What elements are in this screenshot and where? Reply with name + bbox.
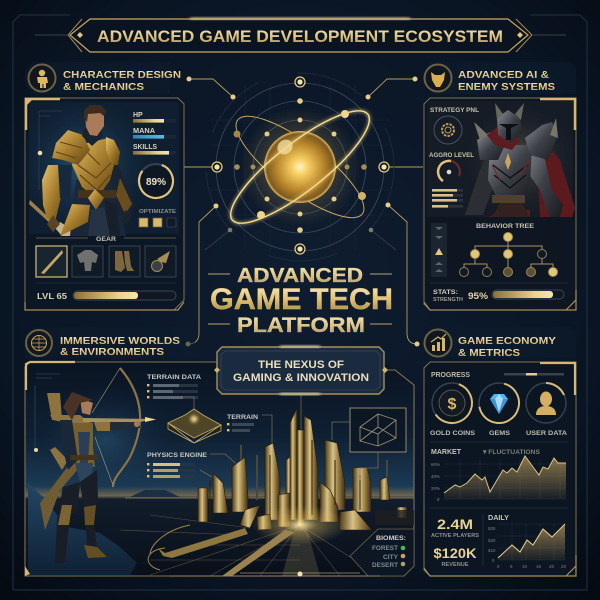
heading: worlds bbox=[25, 327, 195, 358]
city light bbox=[252, 505, 348, 545]
callout: the nexus: THE NEXUS OF bbox=[258, 359, 344, 371]
title banner: ADVANCED GAME DEVELOPMENT ECOSYSTEM bbox=[97, 27, 503, 46]
gold coins: $ bbox=[448, 396, 457, 413]
daily chart: $10 bbox=[488, 548, 496, 553]
cliff bbox=[28, 483, 137, 575]
biomes legend: FOREST bbox=[372, 545, 398, 552]
main title: ADVANCED bbox=[237, 265, 363, 287]
behavior tree: BEHAVIOR TREE bbox=[476, 223, 535, 230]
central atom graphic bbox=[184, 73, 423, 346]
panel: game economy bbox=[424, 327, 576, 576]
grid bbox=[210, 85, 390, 250]
orbit rings bbox=[206, 73, 394, 261]
strategy gear dial: STRATEGY PNL bbox=[430, 107, 479, 114]
daily chart: 5 bbox=[510, 564, 513, 569]
character: dark knight bbox=[465, 103, 575, 217]
aggro gauge bbox=[429, 152, 474, 181]
wireframe cube bbox=[332, 408, 406, 480]
connector lines bbox=[184, 79, 423, 344]
daily chart bbox=[488, 515, 567, 569]
daily chart: 0 bbox=[492, 558, 495, 563]
biomes legend: DESERT bbox=[372, 562, 398, 569]
stats strength bar: STRENGTH bbox=[433, 297, 463, 303]
gold coins: GOLD COINS bbox=[430, 430, 475, 437]
main title: PLATFORM bbox=[237, 314, 365, 337]
callout: the nexus bbox=[214, 346, 388, 395]
daily chart: $30 bbox=[488, 526, 496, 531]
stat bars: SKILLS bbox=[133, 144, 157, 151]
behavior tree bbox=[431, 223, 558, 277]
terrain data list bbox=[147, 374, 201, 410]
terrain label bbox=[227, 414, 272, 445]
heading: economy: & METRICS bbox=[458, 348, 520, 359]
golden orb bbox=[264, 131, 336, 203]
market chart: 0 bbox=[437, 497, 440, 502]
stat bars bbox=[133, 112, 176, 155]
user data: USER DATA bbox=[526, 430, 567, 437]
character: archer bbox=[40, 368, 156, 563]
stats strength bar: STATS: bbox=[433, 289, 458, 296]
biomes legend: CITY bbox=[383, 554, 399, 561]
gear slots: GEAR bbox=[96, 236, 116, 243]
market chart: 40% bbox=[431, 474, 440, 479]
daily chart: $20 bbox=[488, 538, 496, 543]
strategy gear dial bbox=[430, 107, 479, 144]
gems bbox=[475, 379, 523, 437]
daily chart: 20 bbox=[549, 564, 555, 569]
heading: AI: ADVANCED AI & bbox=[458, 70, 549, 81]
heading: character: CHARACTER DESIGN bbox=[63, 70, 181, 81]
physics engine list: PHYSICS ENGINE bbox=[147, 452, 207, 459]
gear slots bbox=[36, 236, 176, 277]
kpi numbers: ACTIVE PLAYERS bbox=[431, 533, 480, 539]
frame lines bbox=[25, 362, 414, 576]
kpi numbers: $120K bbox=[434, 545, 476, 561]
panel: AI and enemy systems bbox=[424, 62, 580, 310]
user data bbox=[526, 383, 567, 437]
heading: AI bbox=[424, 62, 576, 94]
terrain label: TERRAIN bbox=[227, 414, 258, 421]
character: gold warrior bbox=[29, 105, 135, 236]
stat bars: MANA bbox=[133, 128, 155, 135]
market chart bbox=[431, 449, 566, 502]
callout: the nexus: GAMING & INNOVATION bbox=[233, 372, 369, 384]
progress ring 89%: 89% bbox=[146, 177, 166, 188]
heading: economy: GAME ECONOMY bbox=[458, 336, 556, 347]
kpi numbers bbox=[431, 514, 483, 568]
terrain data list: TERRAIN DATA bbox=[147, 374, 201, 381]
heading: character bbox=[25, 62, 181, 94]
stats strength bar bbox=[430, 283, 568, 303]
gems: GEMS bbox=[489, 430, 510, 437]
heading: character: & MECHANICS bbox=[63, 82, 144, 93]
heading: worlds: & ENVIRONMENTS bbox=[60, 347, 164, 358]
stat bars: HP bbox=[133, 112, 143, 119]
biomes legend bbox=[350, 529, 414, 576]
optimize toggles: OPTIMIZATE bbox=[139, 209, 176, 215]
optimize toggles bbox=[139, 209, 176, 227]
main title: GAME TECH bbox=[210, 283, 393, 316]
level bar bbox=[36, 283, 176, 301]
daily chart: 0 bbox=[497, 564, 500, 569]
market chart: ▾ FLUCTUATIONS bbox=[482, 449, 540, 456]
physics engine list bbox=[147, 452, 240, 478]
progress header bbox=[431, 372, 564, 379]
terrain tile bbox=[168, 409, 221, 443]
heading: worlds: IMMERSIVE WORLDS bbox=[60, 336, 180, 347]
daily chart: 20 bbox=[561, 564, 567, 569]
biomes legend: BIOMES: bbox=[376, 535, 406, 542]
panel: immersive worlds bbox=[25, 327, 414, 576]
kpi numbers: REVENUE bbox=[442, 562, 469, 568]
market chart: 20% bbox=[431, 486, 440, 491]
daily chart: 15 bbox=[536, 564, 542, 569]
aggro gauge: AGGRO LEVEL bbox=[429, 152, 474, 159]
heading: economy bbox=[424, 327, 576, 359]
panel: character design bbox=[15, 62, 184, 310]
daily chart: 10 bbox=[522, 564, 528, 569]
orbit nodes bbox=[186, 76, 420, 346]
futuristic city bbox=[148, 395, 414, 576]
main title bbox=[208, 265, 393, 337]
level bar: LVL 65 bbox=[37, 291, 67, 301]
progress ring 89% bbox=[134, 159, 178, 203]
market chart: 60% bbox=[431, 462, 440, 467]
ground grid bbox=[120, 515, 380, 576]
market chart: MARKET bbox=[431, 449, 462, 456]
gold coins bbox=[426, 377, 478, 437]
stats strength bar: 95% bbox=[468, 291, 488, 301]
threat bars bbox=[432, 189, 463, 208]
daily chart: DAILY bbox=[488, 515, 509, 522]
heading: AI: ENEMY SYSTEMS bbox=[458, 82, 555, 93]
title banner bbox=[35, 18, 566, 52]
progress header: PROGRESS bbox=[431, 372, 470, 379]
kpi numbers: 2.4M bbox=[437, 516, 473, 532]
